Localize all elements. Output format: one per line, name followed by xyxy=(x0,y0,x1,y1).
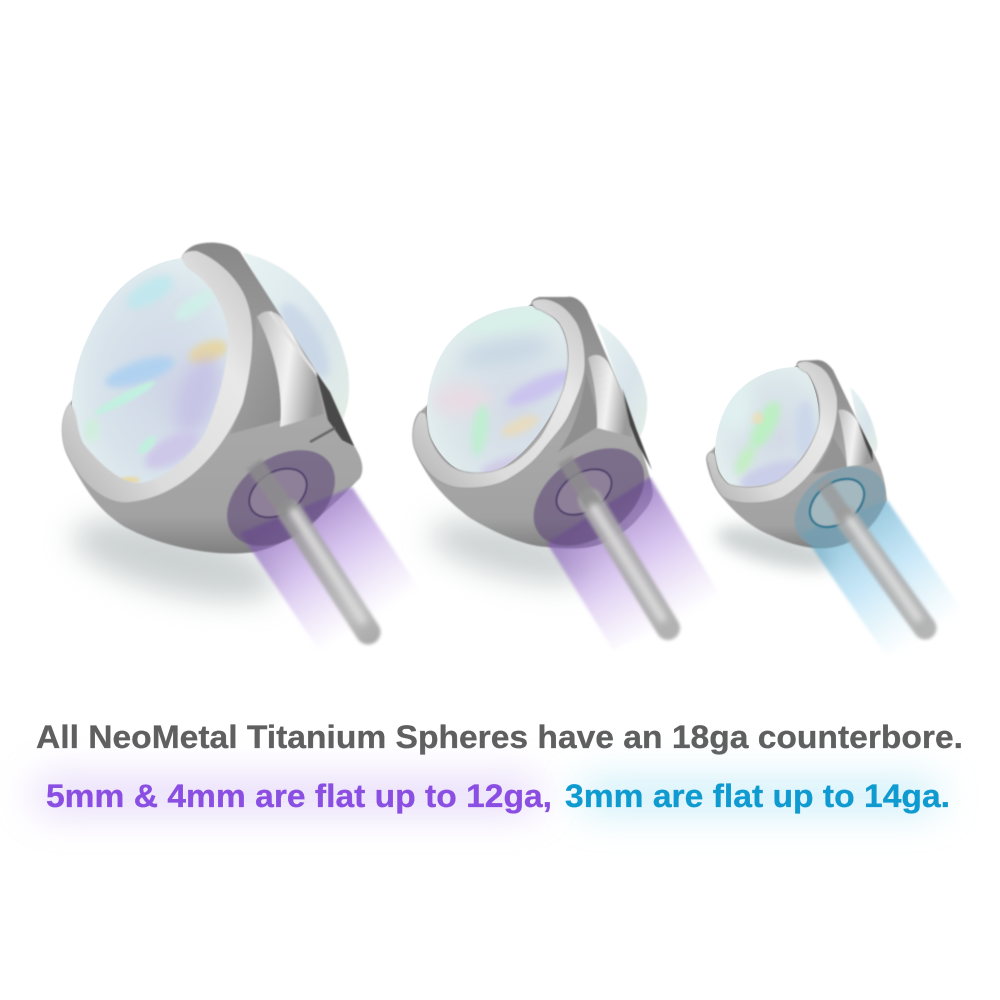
dark reflection xyxy=(858,422,873,462)
front crescent band xyxy=(413,299,585,488)
purple glow xyxy=(34,780,539,810)
dome highlight xyxy=(257,311,324,427)
ground shadow xyxy=(425,509,595,595)
caption text xyxy=(34,719,963,814)
counterbore xyxy=(209,430,353,566)
front crescent band xyxy=(707,361,837,503)
flat seat xyxy=(548,460,620,524)
blue glow xyxy=(578,782,940,810)
counterbore xyxy=(779,449,901,565)
heading line: All NeoMetal Titanium Spheres have an 18ga counterbore. xyxy=(36,719,963,755)
front opal xyxy=(427,306,568,474)
purple beam xyxy=(240,487,425,652)
dome highlight xyxy=(838,410,872,467)
rear opal xyxy=(850,387,877,453)
small 3mm sphere xyxy=(706,360,967,657)
blue size note: 3mm are flat up to 14ga. xyxy=(565,778,950,814)
threaded pin xyxy=(822,482,925,628)
side shade xyxy=(813,437,847,474)
purple size note: 5mm & 4mm are flat up to 12ga, xyxy=(46,778,552,814)
blue beam xyxy=(802,500,967,657)
flat seat xyxy=(241,459,315,527)
rear opal xyxy=(243,253,349,428)
large 5mm sphere xyxy=(60,243,425,652)
rear strap highlight xyxy=(270,312,318,376)
front opal xyxy=(72,258,229,484)
metal body xyxy=(413,297,653,548)
threaded pin xyxy=(565,460,668,628)
front crescent band xyxy=(62,251,252,502)
purple beam xyxy=(547,477,723,650)
ground shadow xyxy=(65,504,285,616)
metal body xyxy=(706,360,887,548)
flat seat xyxy=(801,469,873,537)
ground shadow xyxy=(713,518,837,578)
threaded pin xyxy=(254,464,368,632)
front opal xyxy=(715,367,819,487)
side shade xyxy=(558,372,597,452)
counterbore xyxy=(515,428,663,566)
dome highlight xyxy=(588,355,632,437)
reflection line xyxy=(310,428,335,442)
dark reflection xyxy=(316,372,354,446)
metal body xyxy=(62,243,362,554)
side shade xyxy=(230,315,282,434)
medium 4mm sphere xyxy=(413,297,723,650)
rear opal xyxy=(597,323,647,437)
rear opal shimmer xyxy=(272,297,338,383)
dark reflection xyxy=(622,388,652,470)
